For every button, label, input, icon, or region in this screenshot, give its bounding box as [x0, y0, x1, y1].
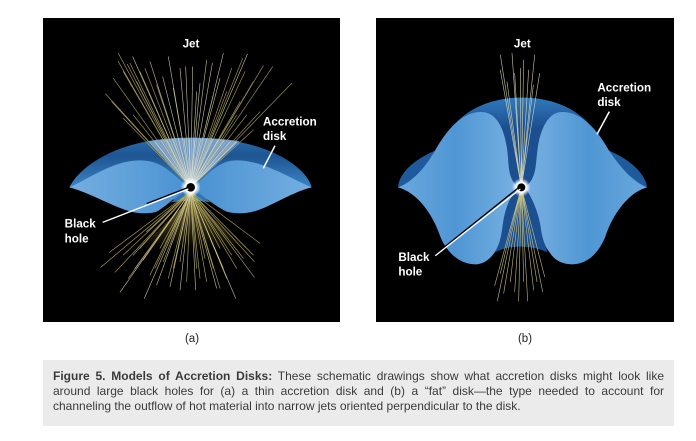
sub-label (b): (b) [518, 333, 532, 345]
label: Accretion disk: Accretion [597, 81, 651, 94]
label: Black hole: Black [65, 218, 96, 231]
caption panel: channeling the outflow of hot material into narrow jets oriented perpendicular to the disk. [53, 399, 521, 413]
label: Black hole: hole [65, 232, 89, 245]
left lobe of fat disk [398, 112, 519, 264]
left lobe of thin disk [69, 160, 187, 213]
back rim of thin disk [69, 138, 312, 202]
right lobe of thin disk [195, 160, 312, 213]
left back ear of fat disk [398, 150, 449, 187]
translucent jet fan over disk [148, 138, 240, 187]
pointer: accretion disk [597, 112, 609, 134]
label: Accretion disk: Accretion [263, 115, 317, 128]
jet of fat disk [495, 53, 545, 301]
caption panel [43, 360, 674, 426]
pointer: accretion disk [263, 146, 275, 168]
panel: fat accretion disk (b) [376, 18, 674, 322]
lower jet [101, 192, 260, 298]
label: Black hole: hole [398, 266, 423, 279]
right lobe of fat disk [525, 112, 647, 264]
sub-label (a): (a) [185, 333, 199, 345]
upper jet [106, 53, 292, 187]
right back ear of fat disk [595, 150, 647, 187]
caption panel: Figure 5. Models of Accretion Disks: These schematic drawings show what accretion disks might look like [53, 369, 664, 383]
back upper rim and central funnel [455, 98, 589, 192]
lower lens of disk behind black hole [171, 187, 211, 202]
label: Jet: Jet [183, 38, 200, 51]
icon: black hole [512, 178, 531, 197]
lower funnel of fat disk [495, 182, 547, 252]
icon: black hole [181, 177, 201, 197]
panel: thin accretion disk (a) [43, 18, 340, 322]
caption panel: around large black holes for (a) a thin accretion disk and (b) a “fat” disk—the type needed to account for [53, 384, 664, 398]
pointer: black hole [435, 187, 520, 256]
label: Jet: Jet [514, 38, 531, 51]
pointer: black hole [103, 187, 188, 222]
label: Accretion disk: disk [597, 96, 621, 109]
lower jet glow [140, 199, 247, 248]
label: Accretion disk: disk [263, 130, 287, 143]
label: Black hole: Black [398, 251, 429, 264]
